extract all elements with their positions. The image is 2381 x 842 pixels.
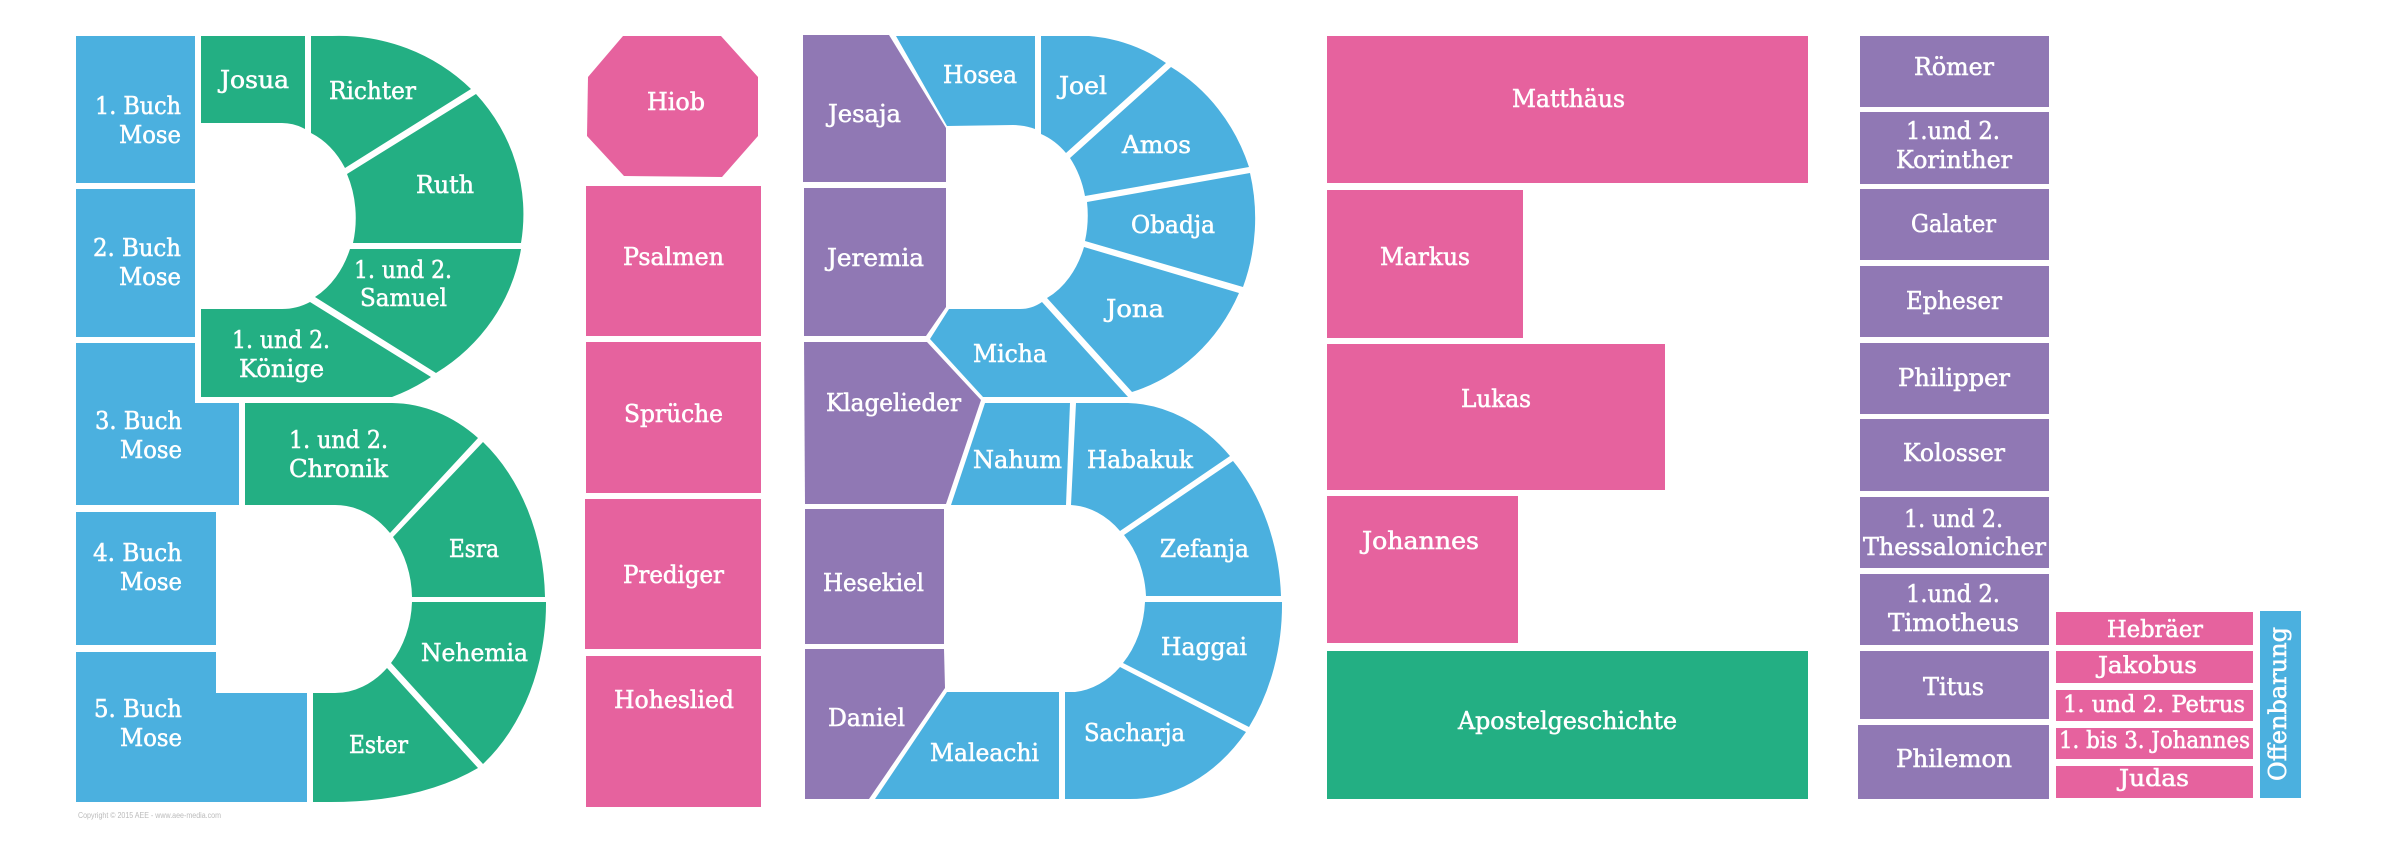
segment: Micha [930,302,1128,397]
segment: Habakuk: Habakuk [1087,446,1193,474]
segment: Matthäus [1327,36,1808,183]
segment: 1.und 2. Korinther [1860,112,2049,184]
segment: Prediger: Prediger [623,561,724,589]
segment: Psalmen [586,186,761,336]
segment: Philemon: Philemon [1896,745,2012,773]
segment: Jesaja: Jesaja [825,100,901,128]
segment: Hebräer: Hebräer [2107,617,2203,643]
segment: Esra: Esra [449,535,499,563]
segment: 1. und 2. Könige [201,302,431,397]
segment: Kolosser: Kolosser [1903,439,2006,467]
segment: Philipper: Philipper [1898,364,2011,392]
segment: Römer [1860,36,2049,107]
segment: Klagelieder [804,342,981,504]
segment: Hiob [587,36,758,177]
segment: Markus: Markus [1380,243,1470,271]
segment: Esra [393,442,545,597]
segment: Amos: Amos [1121,131,1191,159]
small pink stack: general epistles [2056,612,2253,798]
segment: Haggai [1123,602,1282,727]
segment: Amos [1070,67,1249,196]
segment: Psalmen: Psalmen [623,243,724,271]
segment: Hoheslied [586,656,761,807]
letter B: prophets [803,35,1282,799]
segment: 1.und 2. Timotheus: Timotheus [1888,609,2019,637]
segment: Ruth [347,94,523,243]
segment: Haggai: Haggai [1161,633,1247,661]
segment: 1.und 2. Korinther: 1.und 2. [1906,117,2000,145]
segment: Obadja [1085,173,1255,287]
segment: Philipper [1860,343,2049,414]
segment: Kolosser [1860,419,2049,491]
segment: Sprüche: Sprüche [624,400,723,428]
segment: Titus [1860,651,2049,719]
segment: Hosea: Hosea [943,61,1017,89]
segment: Philemon [1858,725,2049,799]
segment: Nehemia: Nehemia [421,639,528,667]
segment: Lukas: Lukas [1461,385,1531,413]
segment: Apostelgeschichte: Apostelgeschichte [1457,707,1677,735]
segment: Nahum [951,403,1070,505]
segment: 5. Buch Mose: 5. Buch [94,695,182,723]
segment: 1. und 2. Könige: Könige [239,355,324,383]
segment: Prediger [585,499,761,649]
segment: Richter: Richter [329,77,417,105]
segment: 2. Buch Mose: 2. Buch [93,234,181,262]
segment: 4. Buch Mose: 4. Buch [93,539,182,567]
letter L: epistles and Revelation [1858,36,2301,799]
segment: 1.und 2. Timotheus: 1.und 2. [1906,580,2000,608]
segment: Johannes [1327,496,1518,643]
segment: Obadja: Obadja [1131,211,1215,239]
segment: Jona [1047,247,1239,392]
segment: Daniel: Daniel [828,704,905,732]
segment: Titus: Titus [1923,673,1984,701]
segment: 1. Buch Mose: 1. Buch [95,92,181,120]
segment: 4. Buch Mose: Mose [120,568,182,596]
segment: Jona: Jona [1103,295,1164,323]
segment: 1. und 2. Chronik: Chronik [289,455,388,483]
segment: Jakobus: Jakobus [2096,653,2197,679]
segment: 2. Buch Mose [76,189,195,337]
segment: Epheser [1860,266,2049,337]
segment: Jesaja [803,35,946,182]
segment: Habakuk [1071,403,1230,531]
segment: 5. Buch Mose [76,652,307,802]
segment: Jakobus [2056,651,2253,683]
segment: Galater: Galater [1911,210,1996,238]
segment: Zefanja: Zefanja [1160,535,1249,563]
segment: Jeremia: Jeremia [824,244,924,272]
segment: Römer: Römer [1914,53,1995,81]
segment: 1. und 2. Thessalonicher [1860,497,2049,568]
segment: Hosea [896,36,1035,129]
segment: Ruth: Ruth [416,171,474,199]
segment: Joel [1041,36,1166,153]
copyright note: Copyright © 2015 AEE - www.aee-media.com [78,811,221,820]
segment: 1. bis 3. Johannes: 1. bis 3. Johannes [2059,728,2250,754]
letter I: wisdom books [585,36,761,807]
segment: Judas [2056,766,2253,798]
segment: 1. und 2. Thessalonicher: Thessalonicher [1863,533,2047,561]
segment: Ester: Ester [349,731,408,759]
segment: 1. und 2. Thessalonicher: 1. und 2. [1904,505,2003,533]
segment: Offenbarung: Offenbarung [2264,627,2292,781]
segment: Galater [1860,189,2049,260]
segment: 3. Buch Mose: 3. Buch [95,407,182,435]
segment: Sprüche [586,342,761,493]
segment: Matthäus: Matthäus [1512,85,1625,113]
segment: 1. Buch Mose: Mose [119,121,181,149]
segment: Epheser: Epheser [1906,287,2002,315]
segment: Sacharja [1065,667,1246,799]
segment: 1. und 2. Samuel: Samuel [360,284,447,312]
segment: Nahum: Nahum [973,446,1062,474]
segment: Hoheslied: Hoheslied [614,686,734,714]
segment: Apostelgeschichte [1327,651,1808,799]
segment: Hiob: Hiob [647,88,705,116]
segment: Daniel [805,649,945,799]
segment: Sacharja: Sacharja [1084,719,1185,747]
segment: Klagelieder: Klagelieder [826,389,962,417]
segment: Judas: Judas [2117,766,2189,792]
segment: Zefanja [1124,461,1281,596]
segment: 1. und 2. Könige: 1. und 2. [232,326,330,354]
segment: 3. Buch Mose [76,343,239,505]
segment: Hesekiel: Hesekiel [823,569,924,597]
segment: Hesekiel [805,509,944,644]
segment: 1. und 2. Chronik: 1. und 2. [289,426,388,454]
segment: Micha: Micha [973,340,1047,368]
segment: 1. und 2. Samuel [315,249,521,373]
segment: 4. Buch Mose [76,512,216,645]
segment: Richter [311,36,471,168]
segment: Maleachi: Maleachi [930,739,1039,767]
segment: Nehemia [391,602,546,764]
letter B: Pentateuch and history books [76,36,546,802]
segment: 1. Buch Mose [76,36,195,183]
segment: Joel: Joel [1056,72,1107,100]
segment: Offenbarung [2260,611,2301,798]
letter E: gospels and Acts [1327,36,1808,799]
segment: 1.und 2. Korinther: Korinther [1896,146,2013,174]
segment: Lukas [1327,344,1665,490]
segment: Maleachi [875,692,1059,799]
segment: 1. und 2. Chronik [245,403,478,533]
segment: Jeremia [804,188,946,336]
segment: 5. Buch Mose: Mose [120,724,182,752]
segment: Hebräer [2056,612,2253,645]
segment: 1.und 2. Timotheus [1860,574,2049,645]
segment: 3. Buch Mose: Mose [120,436,182,464]
segment: Josua [201,36,305,129]
segment: Johannes: Johannes [1359,527,1479,555]
segment: Ester [313,668,478,802]
segment: 1. und 2. Petrus: 1. und 2. Petrus [2063,692,2245,718]
segment: Markus [1327,190,1523,338]
segment: 1. und 2. Samuel: 1. und 2. [354,256,452,284]
segment: Josua: Josua [217,66,289,94]
segment: 2. Buch Mose: Mose [119,263,181,291]
